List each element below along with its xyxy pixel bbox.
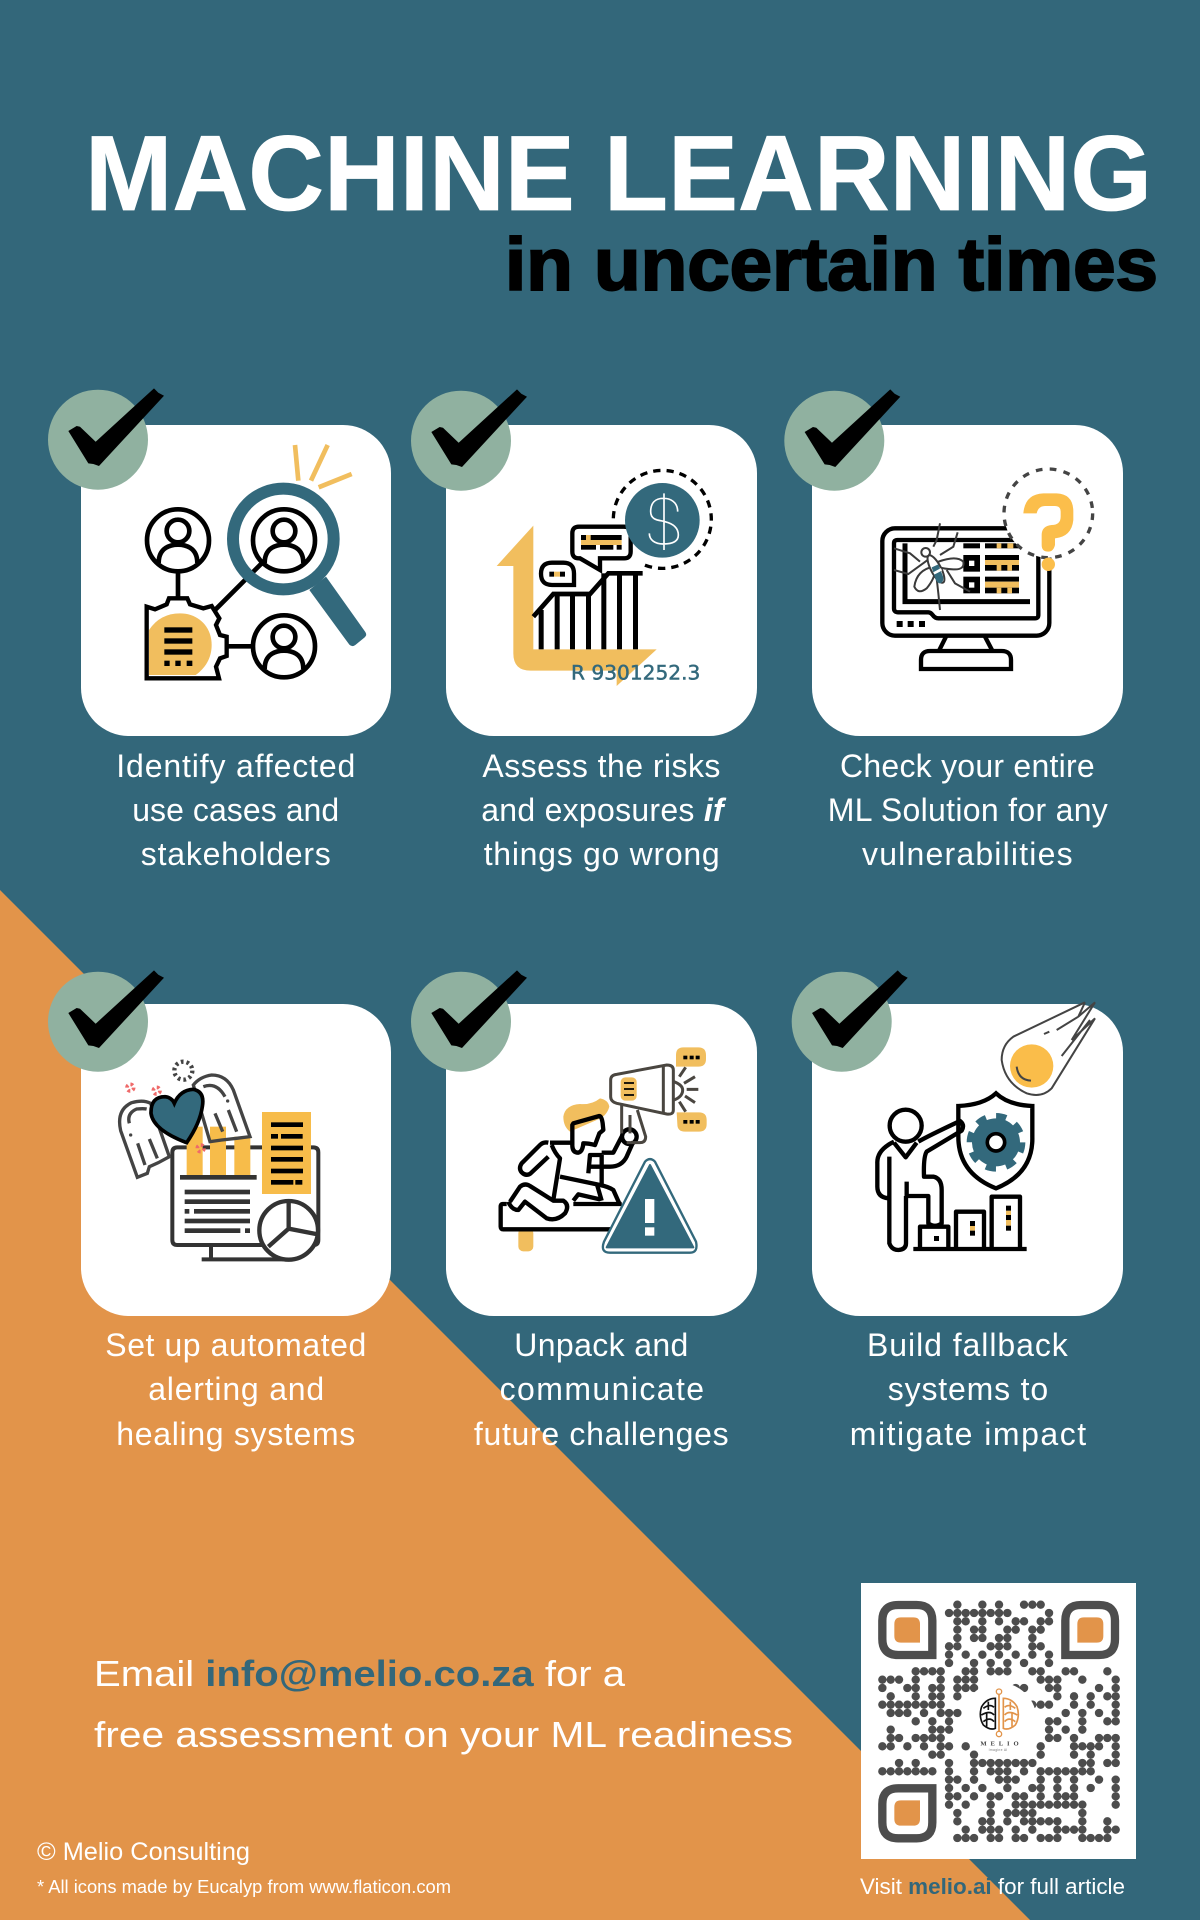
caption: and exposures if [481,792,727,828]
badge: check mark [792,970,908,1072]
icon: runner with megaphone and warning [501,1047,707,1253]
call to action [94,1653,793,1755]
icon: monitor with bug and question mark [882,469,1093,669]
panel: check ML solution [784,389,1123,872]
call to action: Email info@melio.co.za for a [94,1653,626,1694]
call to action: free assessment on your ML readiness [94,1714,793,1755]
icon: person with shield and meteor [877,1002,1095,1250]
card background [812,425,1123,736]
copyright: © Melio Consulting [37,1838,250,1866]
caption [481,748,727,872]
panel: assess the risks [411,389,757,872]
caption: communicate [500,1371,704,1407]
caption: use cases and [132,792,339,828]
badge: check mark [48,388,164,490]
caption: Set up automated [105,1327,366,1363]
subtitle: in uncertain times [505,223,1158,306]
caption: alerting and [148,1371,324,1407]
icon: rising chart and dollar coin: R 9301252.3 [571,661,700,684]
logo: Melio brain: MELIO [980,1741,1019,1748]
caption [850,1327,1086,1452]
article link: Visit melio.ai for full article [860,1874,1125,1899]
caption: systems to [888,1371,1048,1407]
badge: check mark [411,389,527,491]
caption [828,748,1108,872]
caption: Unpack and [514,1327,688,1363]
caption: things go wrong [484,836,720,872]
card background [446,1004,757,1316]
caption [105,1327,366,1452]
icon credit: * All icons made by Eucalyp from www.flaticon.com [37,1877,451,1897]
card background [812,1004,1123,1316]
card background [446,425,757,736]
icon: winged heart and report monitor [120,1062,318,1260]
caption [116,748,355,872]
caption: Assess the risks [482,748,720,784]
badge: check mark [411,970,527,1072]
panel: identify affected use cases [48,388,391,872]
caption: vulnerabilities [862,836,1073,872]
caption: stakeholders [141,836,331,872]
QR code [861,1583,1136,1859]
caption: ML Solution for any [828,792,1108,828]
caption: Identify affected [116,748,355,784]
card background [81,1004,391,1316]
logo: Melio brain [962,1683,1037,1757]
badge: check mark [48,970,164,1072]
icon: rising chart and dollar coin [497,470,711,686]
badge: check mark [784,389,900,491]
title: MACHINE LEARNING [85,113,1152,233]
panel: unpack future challenges [411,970,757,1452]
logo: Melio brain: Imagine AI [989,1748,1007,1752]
caption: mitigate impact [850,1416,1086,1452]
caption: Build fallback [867,1327,1069,1363]
caption: healing systems [116,1416,355,1452]
caption [474,1327,729,1452]
caption: future challenges [474,1416,729,1452]
panel: build fallback systems [792,970,1123,1452]
caption: Check your entire [840,748,1095,784]
panel: automated alerting and healing [48,970,391,1452]
card background [81,425,391,736]
icon: magnifier over connected people [147,445,366,678]
